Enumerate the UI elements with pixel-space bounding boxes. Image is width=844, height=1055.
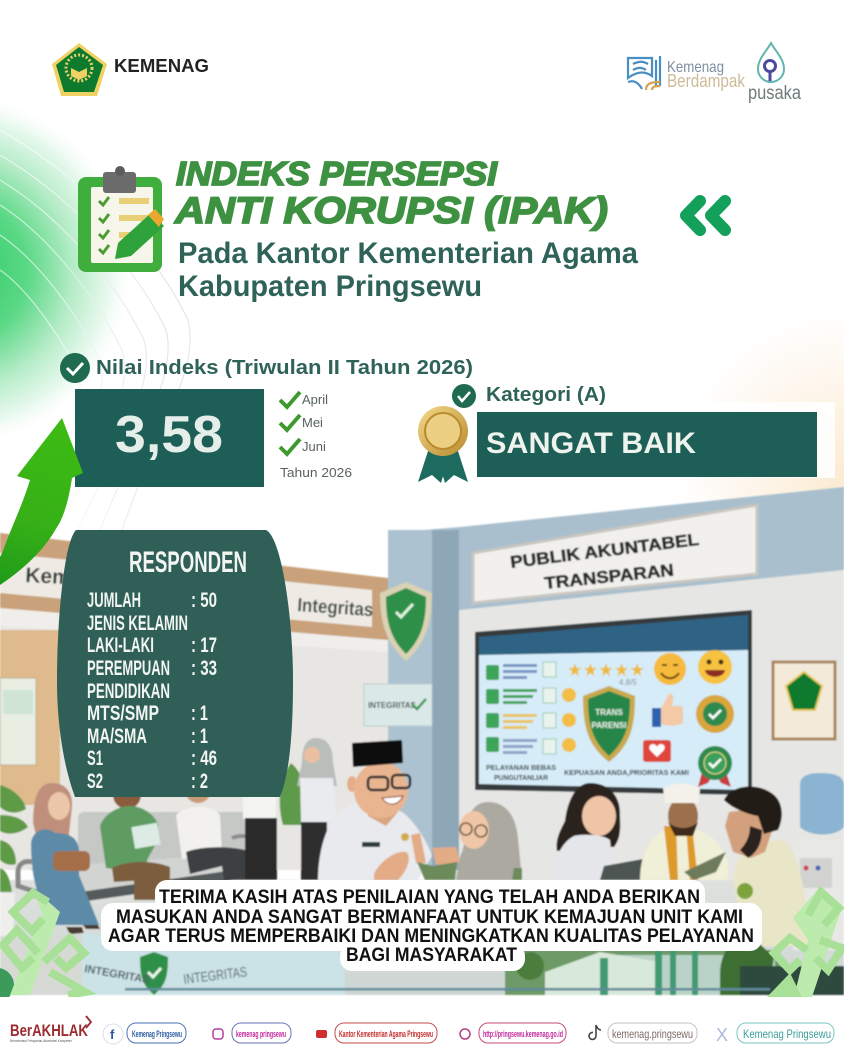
footer: tiktok bbox=[589, 1023, 697, 1043]
scene: bottom strip bbox=[125, 988, 770, 990]
index value box: 3,58 bbox=[115, 406, 223, 464]
scene: glass integritas sign: INTEGRITAS bbox=[368, 701, 417, 710]
scene: tv screen bbox=[475, 610, 752, 795]
scene: office illustration bbox=[0, 487, 844, 995]
scene: left wall bbox=[0, 533, 388, 870]
logo: Kemenag Berdampak bbox=[628, 56, 746, 91]
panel table: : 2 bbox=[191, 770, 208, 793]
panel table: : 46 bbox=[191, 747, 217, 770]
heading: nilai indeks: Nilai Indeks (Triwulan II Tahun 2026) bbox=[96, 357, 473, 379]
footer: BerAKHLAK bbox=[10, 1016, 91, 1043]
subtitle: Kabupaten Pringsewu bbox=[178, 270, 482, 303]
scene: sign: PUBLIK AKUNTABEL bbox=[509, 530, 700, 572]
panel table: : 1 bbox=[191, 725, 208, 748]
scene: picture frame bbox=[773, 662, 835, 739]
panel table: PENDIDIKAN bbox=[87, 680, 170, 703]
arrow: rising green bbox=[0, 418, 83, 585]
scene: left wall: Kemenag bbox=[25, 564, 120, 592]
scene: tv screen: TRANS bbox=[595, 708, 623, 717]
footer: facebook: f bbox=[110, 1027, 115, 1042]
panel table: : 1 bbox=[191, 702, 208, 725]
person: central officer bbox=[318, 740, 432, 880]
panel table: MA/SMA bbox=[87, 725, 147, 748]
person: woman in blue bbox=[31, 783, 100, 934]
person: man in green bbox=[100, 781, 170, 900]
panel table: PEREMPUAN bbox=[87, 657, 170, 680]
logo: Kemenag: KEMENAG bbox=[114, 56, 209, 76]
scene: integritas desk bbox=[0, 933, 345, 995]
logo: pusaka: pusaka bbox=[748, 83, 801, 104]
panel table: : 50 bbox=[191, 589, 217, 612]
panel table: JENIS KELAMIN bbox=[87, 612, 188, 635]
footer: instagram bbox=[213, 1023, 291, 1043]
decoration: left motif bbox=[0, 888, 85, 1002]
period list: April bbox=[302, 392, 328, 407]
footer: website: http://pringsewu.kemenag.go.id bbox=[483, 1029, 563, 1039]
panel table: : 17 bbox=[191, 634, 217, 657]
footer: BerAKHLAK: Berorientasi Pelayanan Akuntabel Kompeten bbox=[10, 1039, 72, 1043]
person: female officer bbox=[552, 783, 648, 880]
footer: youtube: Kantor Kementerian Agama Pringsewu bbox=[339, 1029, 433, 1039]
scene: integritas desk: INTEGRITAS bbox=[83, 963, 150, 986]
footer: BerAKHLAK: BerAKHLAK bbox=[10, 1021, 89, 1040]
scene: building bbox=[505, 937, 844, 995]
period list: Juni bbox=[302, 439, 326, 454]
logo: Kemenag Berdampak: Kemenag bbox=[667, 59, 724, 76]
footer: facebook bbox=[103, 1023, 186, 1044]
footer: x bbox=[716, 1023, 834, 1045]
person: man in khaki uniform bbox=[724, 786, 809, 946]
subtitle: Pada Kantor Kementerian Agama bbox=[178, 237, 638, 270]
scene: water dispenser bbox=[793, 773, 844, 950]
logo: pusaka bbox=[748, 43, 801, 104]
footer: x: X bbox=[716, 1025, 728, 1045]
scene: right wall and pillar bbox=[388, 487, 844, 900]
scene: shield on pillar bbox=[380, 582, 432, 661]
decoration: right motif bbox=[767, 887, 842, 997]
kategori box bbox=[477, 402, 835, 478]
panel heading: RESPONDEN bbox=[129, 546, 247, 579]
panel table: MTS/SMP bbox=[87, 702, 159, 725]
footer: instagram: kemenag pringsewu bbox=[236, 1029, 286, 1039]
panel table: LAKI-LAKI bbox=[87, 634, 154, 657]
icon: clipboard bbox=[78, 166, 164, 272]
responden panel bbox=[57, 530, 293, 797]
thank-you message: MASUKAN ANDA SANGAT BERMANFAAT UNTUK KEMAJUAN UNIT KAMI bbox=[116, 907, 743, 928]
heading: kategori bbox=[452, 384, 606, 408]
footer bbox=[0, 997, 844, 1055]
person: standing in black bbox=[243, 795, 277, 880]
title: ANTI KORUPSI (IPAK) bbox=[174, 190, 608, 231]
kategori box: SANGAT BAIK bbox=[486, 427, 696, 460]
scene: tv screen: ★★★★★ bbox=[567, 660, 645, 680]
scene: tv screen: 4.8/5 bbox=[619, 678, 637, 687]
scene: tv screen: KEPUASAN ANDA,PRIORITAS KAMI bbox=[564, 770, 689, 777]
heading: nilai indeks bbox=[60, 353, 473, 383]
logo: Kemenag bbox=[52, 43, 209, 96]
period list: Mei bbox=[302, 415, 323, 430]
footer: website bbox=[460, 1023, 566, 1043]
footer: facebook: Kemenag Pringsewu bbox=[132, 1029, 182, 1039]
icon: medal bbox=[418, 406, 468, 483]
person: elderly woman bbox=[411, 802, 522, 880]
scene: plant pot bbox=[0, 893, 15, 936]
footer: youtube bbox=[316, 1023, 437, 1043]
scene: tv screen: PELAYANAN BEBAS bbox=[486, 765, 556, 772]
heading: kategori: Kategori (A) bbox=[486, 384, 606, 406]
thank-you message: BAGI MASYARAKAT bbox=[346, 945, 517, 966]
logo: Kemenag Berdampak: Berdampak bbox=[667, 71, 746, 91]
panel table: JUMLAH bbox=[87, 589, 141, 612]
person: man in cream with scarf bbox=[640, 784, 728, 880]
person: man in white bbox=[176, 777, 246, 880]
index value box bbox=[75, 389, 264, 487]
panel table: S2 bbox=[87, 770, 103, 793]
period list bbox=[280, 392, 352, 480]
scene: floor bbox=[0, 880, 844, 995]
scene: waiting chairs bbox=[18, 812, 262, 906]
scene: integritas desk: INTEGRITAS bbox=[182, 963, 248, 987]
scene: glass integritas sign bbox=[364, 684, 432, 726]
period list: Tahun 2026 bbox=[280, 465, 352, 480]
subtitle bbox=[178, 237, 638, 303]
scene: tv screen: PUNGUTANLIAR bbox=[494, 775, 548, 782]
scene: left wall: Integritas bbox=[297, 595, 374, 621]
scene: plant back bbox=[280, 763, 305, 825]
footer: tiktok: kemenag.pringsewu bbox=[612, 1027, 693, 1041]
thank-you message: AGAR TERUS MEMPERBAIKI DAN MENINGKATKAN KUALITAS PELAYANAN bbox=[108, 926, 754, 947]
title bbox=[174, 155, 608, 231]
icon: double chevron bbox=[686, 201, 725, 230]
title: INDEKS PERSEPSI bbox=[176, 155, 498, 192]
person: woman with hijab standing bbox=[297, 738, 337, 880]
scene: sign: TRANSPARAN bbox=[543, 560, 675, 593]
scene: plant left bbox=[0, 785, 28, 892]
scene: tv screen: PARENSI bbox=[592, 721, 626, 730]
thank-you message bbox=[101, 880, 762, 971]
scene: sign bbox=[473, 505, 757, 603]
panel table: S1 bbox=[87, 747, 103, 770]
panel table: : 33 bbox=[191, 657, 217, 680]
panel table bbox=[87, 589, 217, 793]
thank-you message: TERIMA KASIH ATAS PENILAIAN YANG TELAH ANDA BERIKAN bbox=[159, 887, 700, 908]
